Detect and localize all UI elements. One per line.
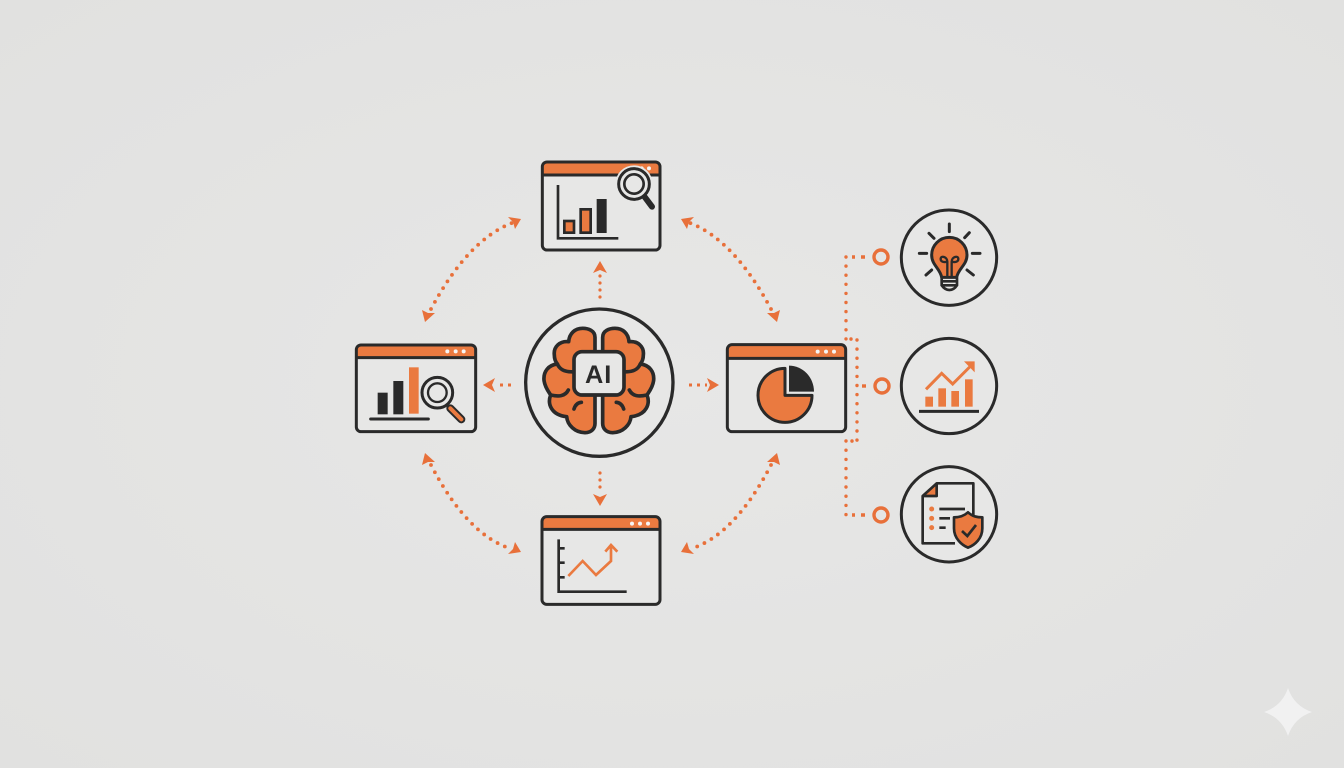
connector node: middle [875, 379, 889, 393]
arrow: hub to right window [689, 378, 719, 392]
connector node: bottom [874, 508, 888, 522]
connector: dotted bus to outcomes [846, 257, 866, 515]
brain left hemisphere [544, 328, 595, 433]
pie [758, 366, 814, 422]
icon: light bulb [901, 210, 997, 305]
hub ring [526, 309, 673, 456]
arrow: hub to left window [483, 378, 511, 392]
arrow: upper-right arc between top and right windows [681, 217, 780, 322]
arrow: lower-left arc between left and bottom windows [422, 453, 521, 554]
trend line [568, 545, 617, 576]
arrow: lower-right arc between bottom and right windows [681, 453, 780, 554]
window: top, bar chart with magnifier [542, 162, 660, 250]
icon: growth chart [901, 338, 997, 434]
arrow: hub to top window [593, 261, 607, 297]
brain right hemisphere [603, 328, 654, 433]
window: bottom, line chart [542, 517, 660, 604]
bars [371, 367, 428, 419]
icon: document with shield [901, 467, 997, 562]
central hub: AI brain [526, 309, 673, 456]
window: right, pie chart [727, 345, 846, 432]
window: left, bar chart with magnifier [356, 345, 476, 432]
arrow: hub to bottom window [593, 473, 607, 506]
bars [564, 199, 607, 233]
axes [558, 185, 618, 238]
connector node: top [874, 250, 888, 264]
icon: sparkle watermark [1264, 688, 1312, 736]
arrow: upper-left arc between left and top windows [422, 217, 521, 322]
magnifier [422, 377, 461, 419]
AI chip label: AI [585, 361, 612, 389]
AI chip label [574, 352, 624, 395]
axes [559, 539, 627, 592]
magnifier [615, 165, 653, 207]
